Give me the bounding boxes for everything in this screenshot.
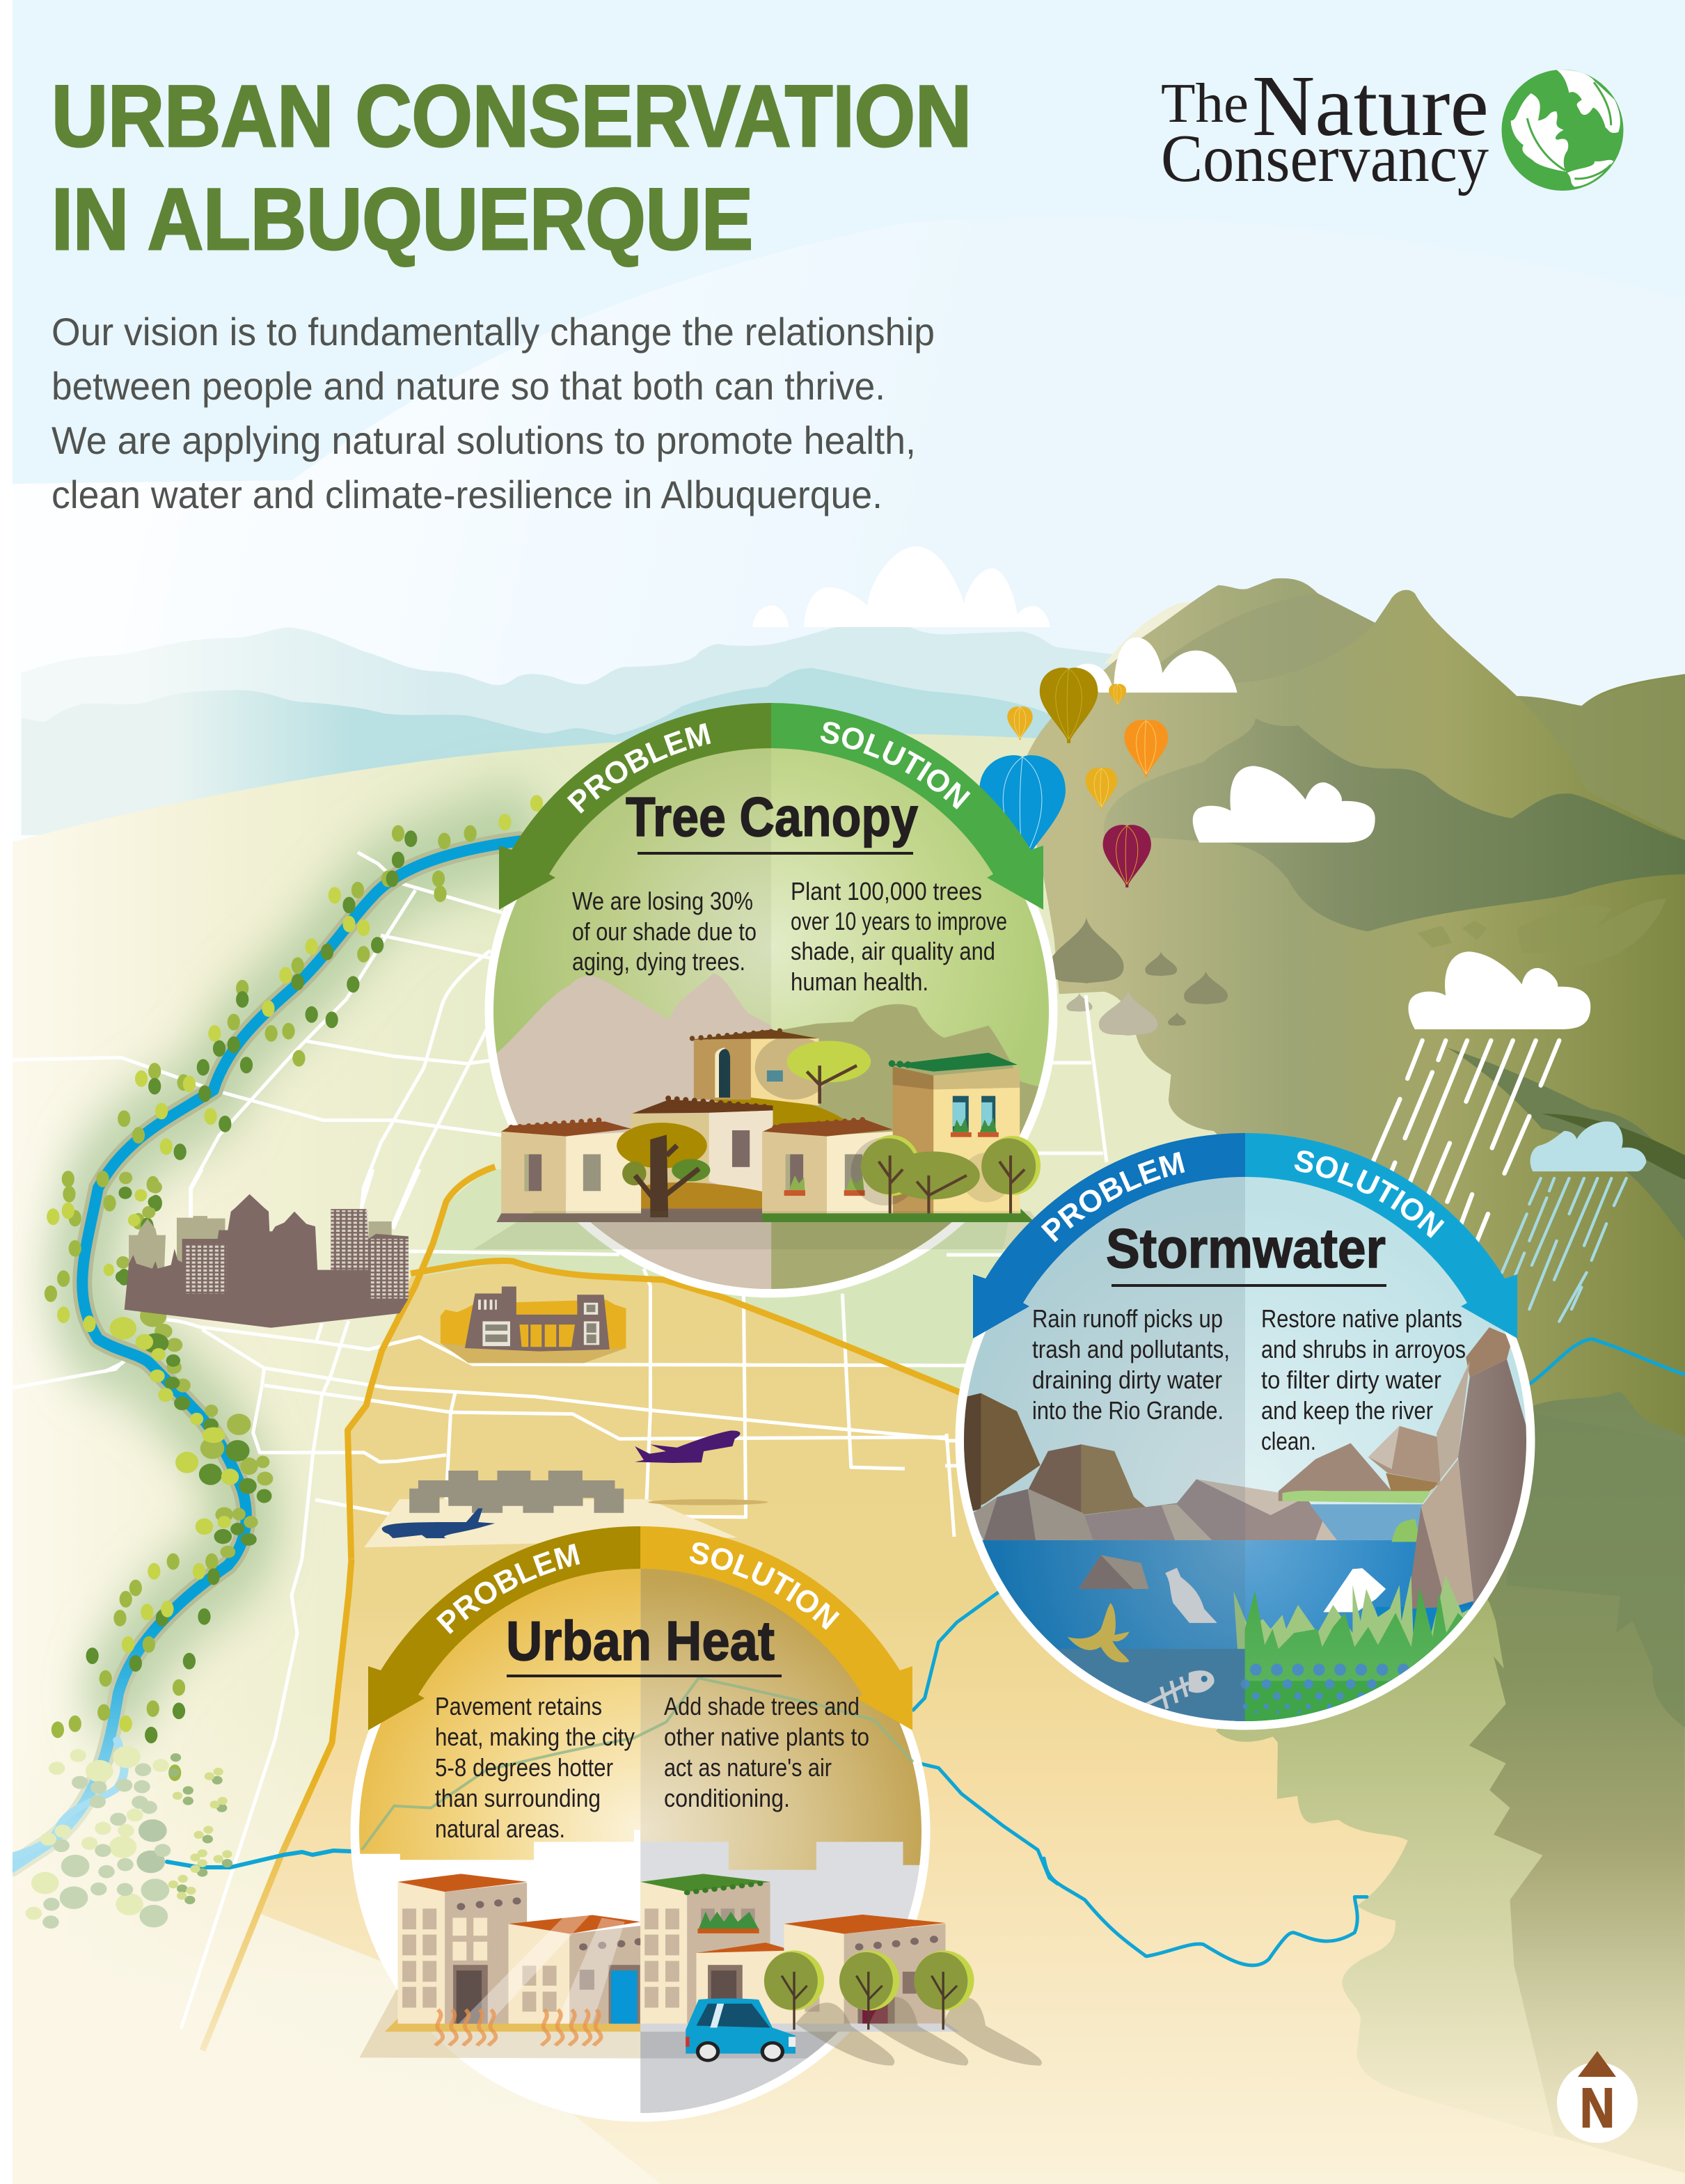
solution text: clean. <box>1261 1427 1316 1455</box>
clouds <box>752 546 1590 1029</box>
solution text: act as nature's air <box>664 1753 832 1782</box>
logo: The Nature Conservancy: The <box>1161 73 1249 134</box>
circle scene <box>964 1177 1526 1721</box>
logo: The Nature Conservancy <box>1161 58 1623 196</box>
ribbon arrows: SOLUTION <box>1295 1150 1445 1238</box>
thin river tributary <box>167 1339 1685 1965</box>
ground <box>13 733 1685 2184</box>
houses illustration <box>496 1029 1041 1222</box>
balloon: blue <box>979 755 1066 867</box>
circle background <box>359 1569 921 2113</box>
problem text <box>572 887 757 976</box>
solution text: Restore native plants <box>1261 1304 1462 1333</box>
problem text <box>435 1692 635 1843</box>
title <box>52 68 972 268</box>
ribbon arrows: PROBLEM <box>567 722 711 814</box>
intro text: Our vision is to fundamentally change the relationship <box>52 310 935 354</box>
title: IN ALBUQUERQUE <box>52 171 753 268</box>
solution text: Plant 100,000 trees <box>791 877 982 905</box>
circle ring <box>960 1155 1530 1725</box>
problem text: aging, dying trees. <box>572 947 745 976</box>
heading underline <box>638 852 913 855</box>
solution text <box>1261 1304 1466 1455</box>
problem text: trash and pollutants, <box>1032 1335 1230 1363</box>
solution text: Add shade trees and <box>664 1692 860 1720</box>
intro text: between people and nature so that both can thrive. <box>52 364 885 408</box>
problem text: than surrounding <box>435 1784 601 1812</box>
ribbon arrows: PROBLEM <box>436 1544 580 1634</box>
left margin <box>0 0 13 2184</box>
Civic building <box>441 1287 626 1363</box>
panel: Urban Heat <box>351 1526 1042 2121</box>
ribbon arrows: SOLUTION <box>689 1542 839 1630</box>
Downtown skyline <box>125 1194 409 1328</box>
panel: Tree Canopy <box>473 703 1058 1297</box>
solution text <box>664 1692 869 1812</box>
title: URBAN CONSERVATION <box>52 68 972 165</box>
problem text: We are losing 30% <box>572 887 753 915</box>
solution text: other native plants to <box>664 1723 869 1751</box>
problem text: of our shade due to <box>572 917 757 946</box>
solution text: and keep the river <box>1261 1396 1433 1425</box>
ribbon arrows <box>973 1133 1517 1338</box>
ribbon arrows: SOLUTION <box>820 722 970 809</box>
tributary in circle <box>362 1678 913 1850</box>
problem text: into the Rio Grande. <box>1032 1396 1224 1425</box>
intro text: We are applying natural solutions to promote health, <box>52 418 916 462</box>
heading: Tree Canopy <box>626 786 918 848</box>
solution text: over 10 years to improve <box>791 907 1007 935</box>
road network <box>12 853 1107 2029</box>
icon: north arrow: N <box>1580 2077 1615 2139</box>
circle background scene <box>493 748 1049 1289</box>
solution text: shade, air quality and <box>791 937 995 965</box>
solution text: conditioning. <box>664 1784 790 1812</box>
balloons <box>1007 667 1168 887</box>
green land north of highway <box>415 1169 1009 1395</box>
problem text: 5-8 degrees hotter <box>435 1753 613 1782</box>
ribbon arrows <box>368 1526 912 1730</box>
bottom fade <box>13 1705 661 2184</box>
buildings and car <box>359 1874 1042 2066</box>
heading underline <box>507 1675 782 1677</box>
problem text: Rain runoff picks up <box>1032 1304 1223 1333</box>
solution text: human health. <box>791 967 928 996</box>
heading underline <box>1112 1284 1386 1287</box>
logo: The Nature Conservancy: Conservancy <box>1161 121 1489 196</box>
problem text <box>1032 1304 1230 1425</box>
logo: The Nature Conservancy: Nature <box>1252 58 1489 155</box>
problem text: heat, making the city <box>435 1723 635 1751</box>
riparian trees <box>12 803 537 1922</box>
ribbon arrows: PROBLEM <box>1041 1151 1185 1242</box>
lower right hills <box>1216 1392 1685 2173</box>
Rio Grande river <box>12 841 519 1867</box>
Airport with planes <box>364 1431 768 1547</box>
mountains <box>1025 578 1685 1583</box>
ribbon arrows <box>499 703 1043 910</box>
problem text: draining dirty water <box>1032 1366 1222 1394</box>
highway <box>203 1166 961 2050</box>
river corridor glow <box>82 834 508 1693</box>
heading: Urban Heat <box>506 1610 775 1672</box>
solution text: to filter dirty water <box>1261 1366 1441 1394</box>
problem text: Pavement retains <box>435 1692 602 1720</box>
urban zone <box>203 1261 1685 2184</box>
panel: Stormwater <box>955 1133 1535 1730</box>
circle ring <box>489 729 1053 1293</box>
problem text: natural areas. <box>435 1814 565 1843</box>
distant hills <box>22 626 1113 835</box>
solution text: and shrubs in arroyos <box>1261 1335 1466 1363</box>
heading: Stormwater <box>1106 1217 1386 1279</box>
circle ring <box>355 1546 926 2117</box>
intro text <box>52 310 935 516</box>
solution text <box>791 877 1007 996</box>
intro text: clean water and climate-resilience in Albuquerque. <box>52 473 883 516</box>
ground shadow <box>473 1211 1058 1249</box>
icon: north arrow <box>1557 2051 1638 2143</box>
rain <box>1372 1040 1646 1322</box>
